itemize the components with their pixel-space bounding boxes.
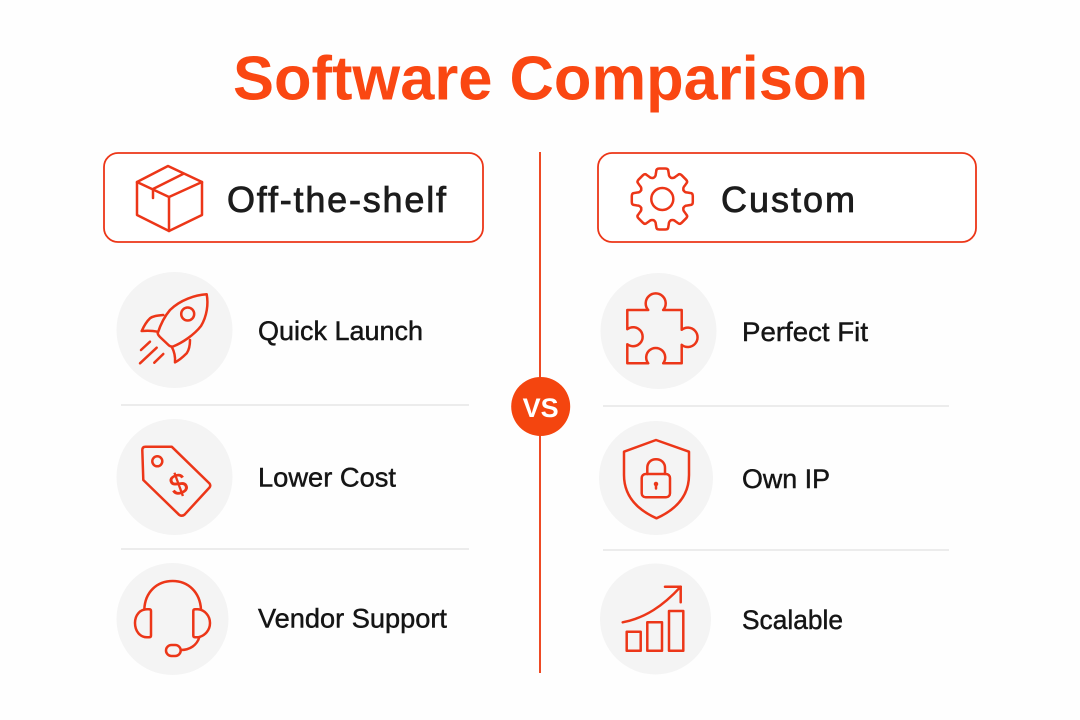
icon: puzzle piece (627, 293, 698, 363)
icon: price tag: $ (165, 467, 192, 503)
heading: Off-the-shelf: Off-the-shelf (227, 179, 447, 220)
label: Perfect Fit: Perfect Fit (742, 317, 869, 347)
title: Software Comparison (233, 44, 868, 114)
row: Scalable (600, 564, 843, 674)
icon: growth chart (623, 587, 683, 651)
icon: price tag (142, 447, 210, 516)
panel: off-the-shelf (104, 153, 483, 675)
row: Lower Cost (116, 419, 396, 535)
icon: headset (135, 581, 210, 656)
header: custom (598, 153, 976, 242)
VS badge: VS (523, 393, 559, 423)
label: Quick Launch: Quick Launch (258, 316, 423, 346)
label: Scalable: Scalable (742, 605, 843, 635)
label: Own IP: Own IP (742, 464, 830, 494)
icon: cardboard box (137, 166, 202, 231)
row: Own IP (599, 421, 830, 535)
row: Quick Launch (116, 272, 423, 388)
center divider line (539, 152, 541, 673)
label: Lower Cost: Lower Cost (258, 463, 396, 493)
icon: gear (632, 168, 693, 230)
panel: custom (598, 153, 976, 674)
icon: rocket (140, 294, 207, 363)
label: Vendor Support: Vendor Support (258, 604, 447, 634)
icon: shield with padlock (624, 440, 689, 518)
VS badge (511, 377, 570, 436)
heading: Custom: Custom (721, 179, 855, 220)
row: Vendor Support (116, 563, 447, 675)
row: Perfect Fit (600, 273, 869, 389)
header: off-the-shelf (104, 153, 483, 242)
